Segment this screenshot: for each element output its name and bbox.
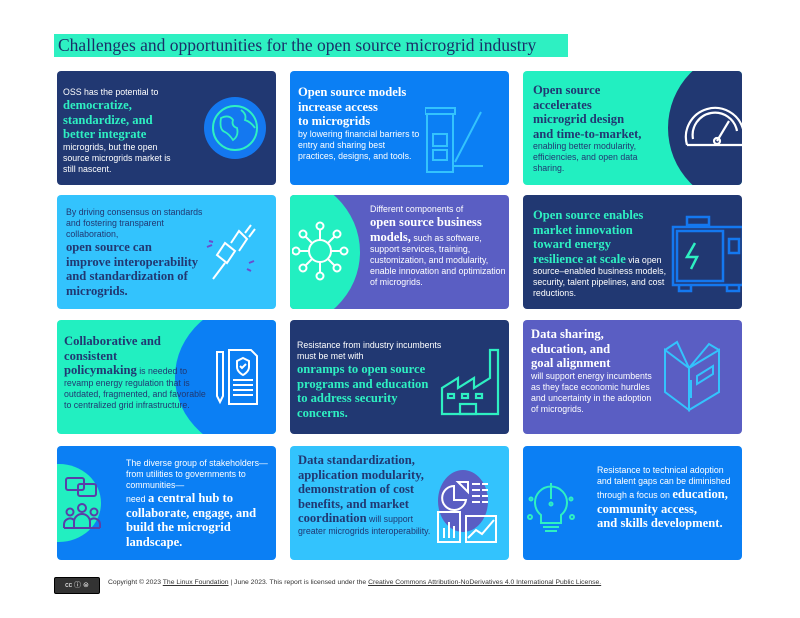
text <box>533 83 641 173</box>
decorative circle <box>200 175 360 329</box>
text: need a central hub to <box>126 491 233 505</box>
text: Data standardization, <box>298 453 415 467</box>
text: Different components of <box>370 204 463 214</box>
text: Resistance to technical adoption and talent gaps can be diminished through a focus on education, <box>597 465 731 501</box>
icon: toll gate <box>425 107 483 173</box>
text: demonstration of cost <box>298 482 414 496</box>
card 7 <box>57 320 276 434</box>
icon: factory <box>440 348 500 416</box>
text <box>533 208 666 298</box>
text: application modularity, <box>298 468 424 482</box>
text: onramps to open source <box>297 362 425 376</box>
card 10 <box>57 446 276 560</box>
text: will support energy incumbents as they face economic hurdles and uncertainty in the adoption of microgrids. <box>531 371 652 414</box>
card 3 <box>523 71 742 185</box>
text <box>66 207 202 298</box>
text <box>531 327 652 414</box>
text: democratize, <box>63 98 132 112</box>
text <box>298 453 430 536</box>
text: landscape. <box>126 535 182 549</box>
text: concerns. <box>297 406 348 420</box>
text: and time-to-market, <box>533 127 641 141</box>
icon: policy document <box>216 349 258 405</box>
card 8 <box>290 320 509 434</box>
card 1 <box>57 71 276 185</box>
text: coordination will support greater microgrids interoperability. <box>298 511 430 536</box>
text: The diverse group of stakeholders—from utilities to governments to communities— <box>126 458 268 490</box>
icon: plug <box>206 224 256 280</box>
text: to address security <box>297 391 398 405</box>
decorative circle <box>175 300 345 454</box>
icon: cc badge: cc ⓘ ⊜ <box>65 582 89 589</box>
text: market innovation <box>533 223 633 237</box>
card 12 <box>523 446 742 560</box>
icon: generator <box>672 216 742 292</box>
text: microgrids. <box>66 284 128 298</box>
text: consistent <box>64 349 117 363</box>
text <box>370 204 505 287</box>
copyright text: Copyright © 2023 The Linux Foundation | June 2023. This report is licensed under the Creative Commons Attribution-NoDerivatives 4.0 International Public License. <box>108 579 601 586</box>
text: Data sharing, <box>531 327 604 341</box>
text: microgrid design <box>533 112 624 126</box>
card 2 <box>290 71 509 185</box>
text: Collaborative and <box>64 334 161 348</box>
text: toward energy <box>533 237 611 251</box>
text: Open source enables <box>533 208 643 222</box>
title: Challenges and opportunities for the open source microgrid industry <box>58 35 536 55</box>
text: build the microgrid <box>126 520 231 534</box>
text: education, and <box>531 342 610 356</box>
card 11 <box>290 446 509 560</box>
icon: globe <box>204 97 266 159</box>
icon: cc badge <box>54 577 100 594</box>
icon: lightbulb <box>527 483 575 532</box>
text: better integrate <box>63 127 146 141</box>
icon: book <box>664 340 720 412</box>
text: enabling better modularity, efficiencies, and open data sharing. <box>533 141 638 173</box>
card 6 <box>523 195 742 309</box>
text: programs and education <box>297 377 428 391</box>
text: benefits, and market <box>298 497 409 511</box>
decorative circle <box>17 464 101 542</box>
icon: charts <box>437 481 497 543</box>
text: to microgrids <box>298 114 370 128</box>
text: policymaking is needed to revamp energy regulation that is outdated, fragmented, and favorable to centralized grid infrastructure. <box>64 363 206 410</box>
text: By driving consensus on standards and fostering transparent collaboration, <box>66 207 202 239</box>
text: OSS has the potential to <box>63 87 158 97</box>
text: Open source models <box>298 85 406 99</box>
text <box>597 465 731 530</box>
text: models, such as software, support services, training, customization, and modularity, enable innovation and optimization of microgrids. <box>370 230 505 287</box>
card 4 <box>57 195 276 309</box>
text: Open source <box>533 83 600 97</box>
text: open source can <box>66 240 152 254</box>
text: open source business <box>370 215 482 229</box>
icon: network <box>292 222 348 280</box>
text: by lowering financial barriers to entry and sharing best practices, designs, and tools. <box>298 129 419 161</box>
icon: gauge <box>684 106 742 146</box>
text: Resistance from industry incumbents must be met with <box>297 340 441 361</box>
decorative circle <box>438 470 488 532</box>
text: and standardization of <box>66 269 188 283</box>
card 9 <box>523 320 742 434</box>
text <box>298 85 419 161</box>
text: improve interoperability <box>66 255 198 269</box>
text: community access, <box>597 502 697 516</box>
text: microgrids, but the open source microgrids market is still nascent. <box>63 142 171 174</box>
text: standardize, and <box>63 113 153 127</box>
text: accelerates <box>533 98 592 112</box>
text: resilience at scale via open source–enabled business models, security, talent pipelines, and cost reductions. <box>533 252 666 298</box>
footer: license <box>54 577 602 594</box>
text <box>297 340 441 420</box>
text <box>63 87 171 174</box>
text: goal alignment <box>531 356 610 370</box>
decorative circle <box>668 51 800 205</box>
text <box>126 458 268 549</box>
text: increase access <box>298 100 378 114</box>
text: collaborate, engage, and <box>126 506 256 520</box>
icon: people <box>63 477 101 529</box>
card 5 <box>290 195 509 309</box>
text: and skills development. <box>597 516 723 530</box>
text <box>64 334 206 410</box>
